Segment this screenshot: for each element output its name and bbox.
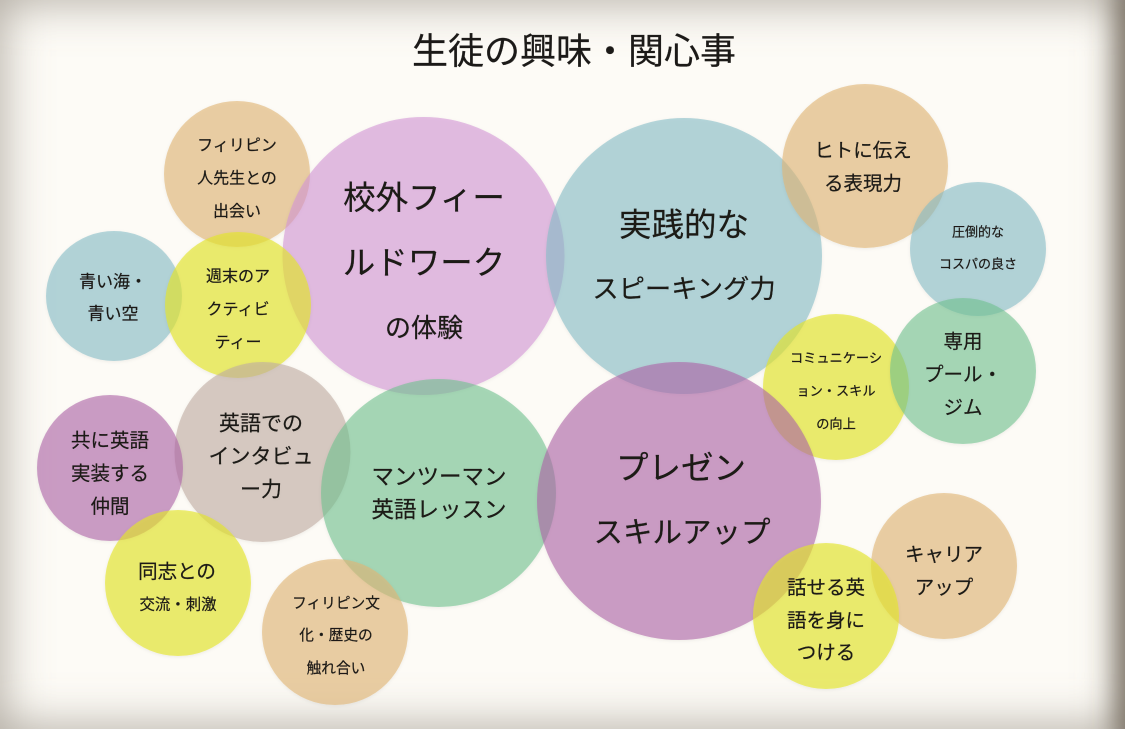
bubble: 共に英語実装する仲間: 共に英語: [71, 430, 149, 452]
bubble: 校外フィールドワークの体験: ルドワーク: [343, 245, 505, 281]
bubble: 圧倒的なコスパの良さ: コスパの良さ: [939, 256, 1017, 272]
bubble: プレゼンスキルアップ: スキルアップ: [593, 516, 771, 550]
bubble: 実践的なスピーキング力: 実践的な: [619, 207, 749, 243]
bubble: フィリピン人先生との出会い: 人先生との: [197, 170, 277, 188]
bubble: 週末のアクティビティー: [165, 232, 311, 378]
bubble: 英語でのインタビュー力: 英語での: [219, 412, 303, 436]
bubble: 青い海・青い空: [46, 231, 182, 361]
bubble: フィリピン人先生との出会い: フィリピン: [197, 138, 277, 154]
bubble: フィリピン文化・歴史の触れ合い: [262, 559, 408, 705]
bubble: キャリアアップ: キャリア: [905, 544, 983, 566]
bubble: 専用プール・ジム: ジム: [943, 397, 983, 419]
bubble: コミュニケーション・スキルの向上: コミュニケーシ: [790, 350, 882, 366]
bubble: 圧倒的なコスパの良さ: 圧倒的な: [952, 224, 1004, 240]
bubble: 共に英語実装する仲間: 実装する: [71, 463, 149, 485]
bubble: 青い海・青い空: 青い海・: [79, 272, 147, 292]
title: 生徒の興味・関心事: [412, 30, 736, 72]
bubble: 週末のアクティビティー: クティビ: [206, 300, 270, 318]
bubble: 青い海・青い空: 青い空: [88, 304, 138, 324]
bubble: 専用プール・ジム: プール・: [924, 364, 1002, 386]
bubble: 英語でのインタビュー力: インタビュ: [208, 446, 314, 468]
bubble: 同志との交流・刺激: [105, 510, 251, 656]
bubble: 専用プール・ジム: 専用: [943, 331, 983, 353]
bubble: 実践的なスピーキング力: スピーキング力: [592, 274, 776, 304]
bubble: コミュニケーション・スキルの向上: の向上: [816, 416, 856, 432]
bubble: ヒトに伝える表現力: る表現力: [824, 173, 902, 195]
bubble: 共に英語実装する仲間: 仲間: [90, 496, 130, 518]
bubble: 週末のアクティビティー: ティー: [214, 334, 262, 352]
bubble: マンツーマン英語レッスン: 英語レッスン: [371, 498, 507, 522]
bubble: フィリピン文化・歴史の触れ合い: 化・歴史の: [299, 627, 373, 644]
bubble: コミュニケーション・スキルの向上: ョン・スキル: [796, 384, 876, 398]
bubble: キャリアアップ: アップ: [915, 577, 974, 599]
bubble: 専用プール・ジム: [890, 298, 1036, 444]
bubble: フィリピン人先生との出会い: 出会い: [213, 202, 261, 220]
bubble: ヒトに伝える表現力: [782, 84, 948, 248]
bubble: フィリピン人先生との出会い: [164, 101, 310, 247]
bubble: 話せる英語を身につける: [753, 543, 899, 689]
bubble: プレゼンスキルアップ: プレゼン: [616, 450, 746, 486]
bubble: 実践的なスピーキング力: [546, 118, 822, 394]
bubble: キャリアアップ: [871, 493, 1017, 639]
bubble: 話せる英語を身につける: 話せる英: [787, 577, 865, 599]
bubble: ヒトに伝える表現力: ヒトに伝え: [814, 140, 912, 162]
bubble: プレゼンスキルアップ: [537, 362, 821, 640]
bubble: 校外フィールドワークの体験: の体験: [385, 313, 463, 343]
bubble: 話せる英語を身につける: 語を身に: [787, 610, 865, 632]
bubble: 校外フィールドワークの体験: [282, 117, 564, 395]
bubble: フィリピン文化・歴史の触れ合い: フィリピン文: [292, 595, 380, 612]
bubble: 圧倒的なコスパの良さ: [910, 182, 1046, 316]
bubble: フィリピン文化・歴史の触れ合い: 触れ合い: [307, 660, 365, 677]
bubble: 週末のアクティビティー: 週末のア: [206, 268, 270, 286]
bubble: 同志との交流・刺激: 交流・刺激: [140, 596, 216, 614]
bubble: コミュニケーション・スキルの向上: [763, 314, 909, 460]
bubble: 校外フィールドワークの体験: 校外フィー: [343, 180, 505, 216]
bubble: 英語でのインタビュー力: [174, 362, 350, 542]
bubble: マンツーマン英語レッスン: [321, 379, 556, 607]
bubble: 話せる英語を身につける: つける: [797, 642, 855, 664]
bubble: 共に英語実装する仲間: [37, 395, 183, 541]
bubble: 同志との交流・刺激: 同志との: [138, 561, 216, 583]
bubble: 英語でのインタビュー力: ー力: [240, 478, 282, 502]
bubble: マンツーマン英語レッスン: マンツーマン: [371, 464, 507, 490]
